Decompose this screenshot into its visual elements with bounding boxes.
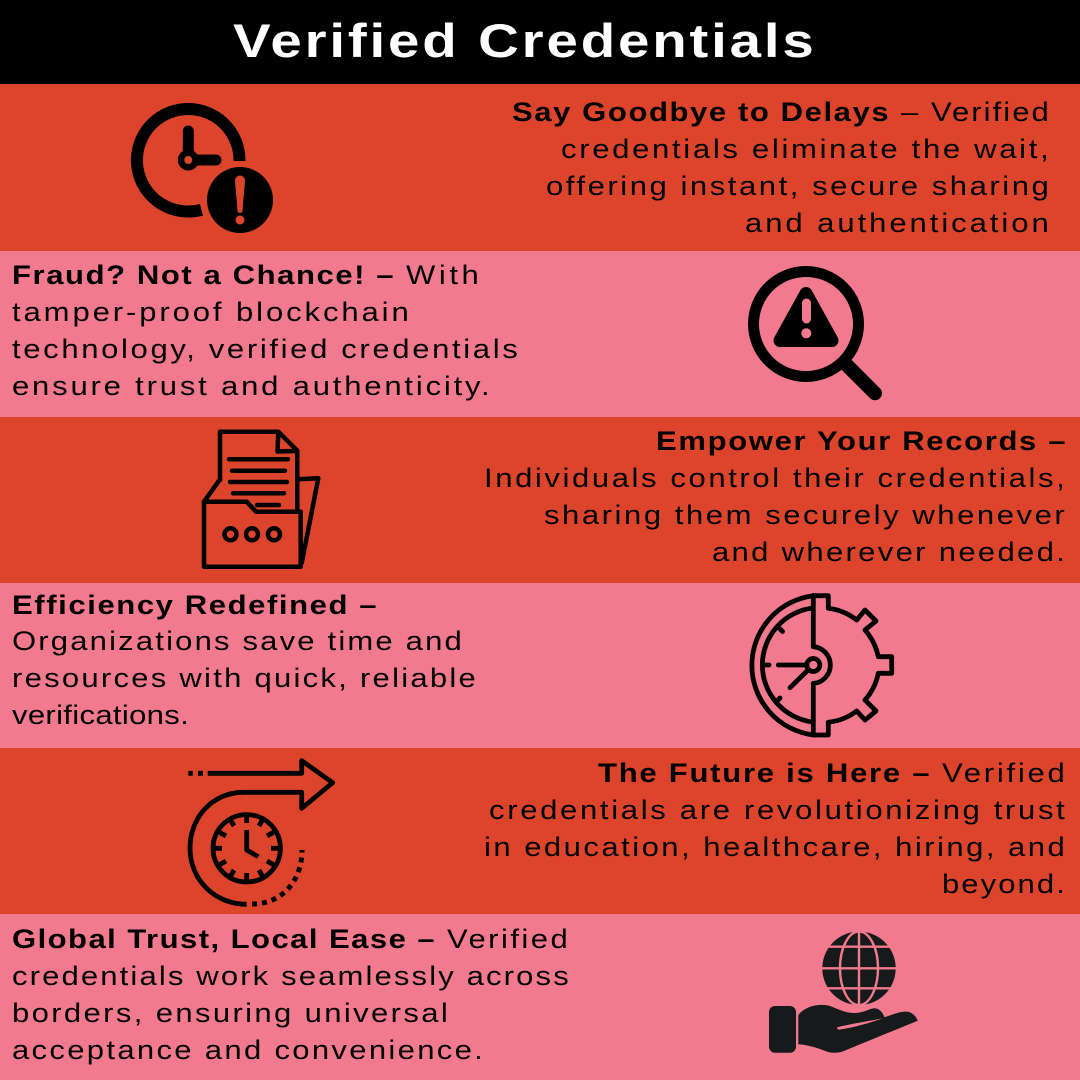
- icon: hand holding globe: [769, 930, 918, 1053]
- panel: fraud: [0, 251, 1080, 417]
- text: efficiency redefined: [12, 591, 476, 730]
- icon: half clock half gear: [752, 596, 892, 735]
- text: global trust: [12, 925, 569, 1065]
- icon: clock with alert: [137, 109, 273, 233]
- text: the future is here: Verified: [942, 759, 1065, 788]
- text: efficiency redefined: verifications.: [12, 701, 189, 730]
- text: global trust: credentials work seamlessly across: [12, 962, 569, 991]
- text: efficiency redefined: Organizations save time and: [12, 627, 462, 656]
- text: global trust: acceptance and convenience.: [12, 1036, 483, 1065]
- text: global trust: Global Trust, Local Ease –: [12, 925, 435, 954]
- text: empower your records: and wherever needed.: [712, 538, 1065, 567]
- text: global trust: Verified: [447, 925, 568, 954]
- text: efficiency redefined: resources with quick, reliable: [12, 664, 476, 693]
- panel: the future is here: [0, 748, 1080, 914]
- panel: efficiency redefined: [0, 583, 1080, 748]
- text: fraud: With: [406, 261, 479, 290]
- text: the future is here: credentials are revolutionizing trust: [489, 796, 1065, 825]
- text: say goodbye to delays: [512, 98, 1049, 238]
- icon: clock with forward arrow: [188, 761, 333, 904]
- text: say goodbye to delays: offering instant, secure sharing: [546, 172, 1049, 201]
- text: empower your records: Individuals control their credentials,: [484, 464, 1065, 493]
- text: fraud: ensure trust and authenticity.: [12, 372, 490, 401]
- text: the future is here: in education, healthcare, hiring, and: [484, 833, 1065, 862]
- icon: folder with document: [204, 432, 318, 567]
- panel: say goodbye to delays: [0, 84, 1080, 251]
- text: say goodbye to delays: credentials eliminate the wait,: [561, 135, 1049, 164]
- panel: global trust: [0, 914, 1080, 1080]
- title: Verified Credentials: [233, 15, 814, 68]
- text: fraud: technology, verified credentials: [12, 335, 518, 364]
- text: the future is here: The Future is Here –: [598, 759, 930, 788]
- text: fraud: tamper-proof blockchain: [12, 298, 409, 327]
- title banner: [0, 0, 1080, 84]
- text: say goodbye to delays: Say Goodbye to Delays: [512, 98, 889, 127]
- text: empower your records: Empower Your Records –: [656, 427, 1066, 456]
- text: the future is here: beyond.: [942, 870, 1065, 899]
- panel: empower your records: [0, 417, 1080, 583]
- text: say goodbye to delays: and authentication: [745, 209, 1049, 238]
- text: say goodbye to delays: – Verified: [901, 98, 1049, 127]
- text: empower your records: [484, 427, 1066, 567]
- text: efficiency redefined: Efficiency Redefined –: [12, 591, 377, 620]
- text: the future is here: [484, 759, 1065, 899]
- text: global trust: borders, ensuring universal: [12, 999, 448, 1028]
- text: fraud: Fraud? Not a Chance! –: [12, 261, 394, 290]
- text: fraud: [12, 261, 518, 401]
- text: empower your records: sharing them securely whenever: [544, 501, 1065, 530]
- icon: magnifier with warning: [754, 272, 875, 393]
